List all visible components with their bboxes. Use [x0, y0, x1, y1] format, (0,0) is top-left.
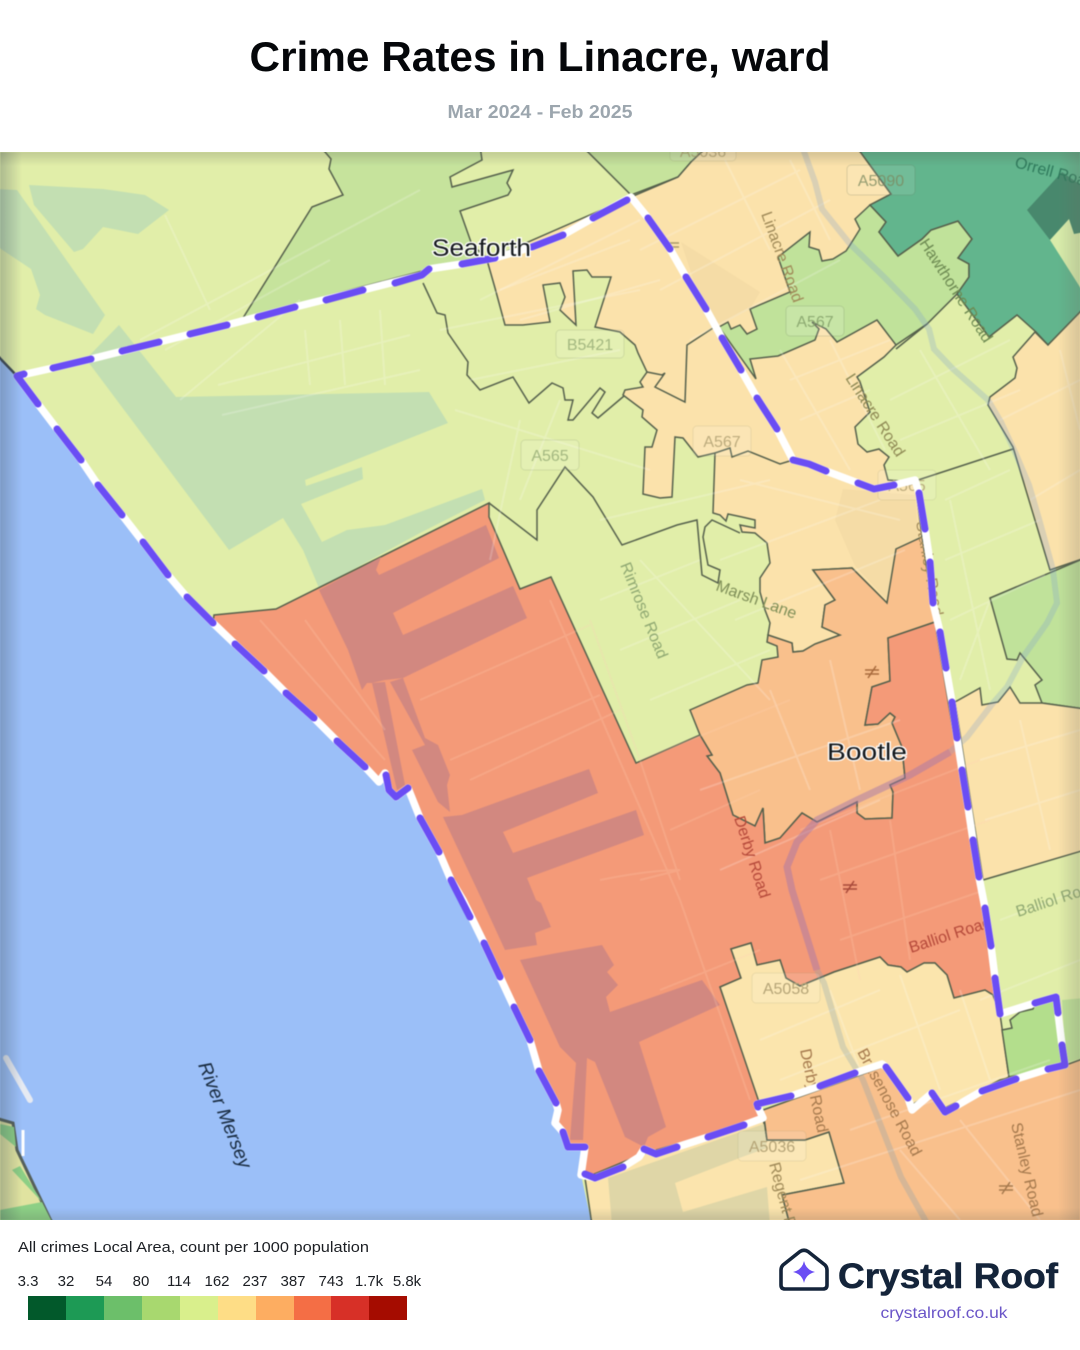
legend tick labels: 5.8k [393, 1273, 422, 1290]
area: light corner east [1050, 219, 1080, 295]
plate A567 west [693, 426, 751, 456]
docks: Seaforth basin [86, 325, 485, 588]
legend tick labels: 80 [133, 1273, 149, 1290]
legend tick labels: 743 [318, 1273, 344, 1290]
area: yellow south [720, 943, 1009, 1108]
street network [140, 160, 1080, 1220]
breakwater marks [6, 1058, 30, 1100]
docks: north pond [29, 185, 169, 252]
plate B5421 [556, 330, 624, 358]
area: red docks and Bootle south [213, 503, 1000, 1178]
road: Derby Road north: Derby Road [730, 814, 773, 900]
map edge shading bottom [0, 1208, 1080, 1220]
road: Linacre Road south: Linacre Road [842, 371, 908, 460]
road: Brasenose Road: Brasenose Road [853, 1046, 924, 1159]
legend tick labels: 162 [204, 1273, 230, 1290]
road: Stanley Road north: Stanley Road [912, 520, 945, 617]
area: green north tip [586, 152, 700, 196]
plate A5036 south [738, 1131, 806, 1161]
plate A565 east [878, 470, 936, 500]
area: light green Balliol small [1000, 1002, 1061, 1078]
area: green east [990, 558, 1080, 709]
legend colour scale [28, 1296, 407, 1320]
canal south [817, 970, 928, 1225]
area: orange Bootle [690, 537, 935, 843]
area: green Seaforth [243, 146, 513, 318]
area: yellow south-east [955, 687, 1080, 880]
plate A567 east [786, 306, 844, 336]
plate A567 west: A567 [703, 434, 741, 451]
road: Derby Road south: Derby Road [796, 1047, 830, 1134]
plate A565: A565 [531, 448, 569, 465]
legend tick labels: 387 [280, 1273, 306, 1290]
dock water: south-west [608, 1124, 770, 1225]
water: River Mersey [0, 353, 592, 1225]
Wirral shore land [0, 1118, 53, 1225]
rail station icons [669, 243, 1013, 1194]
road number plates [521, 135, 936, 1161]
legend tick labels: 54 [96, 1273, 112, 1290]
icon: house with star [781, 1250, 827, 1289]
canal through red area [787, 752, 950, 970]
area: teal Orrell [856, 146, 1080, 345]
map base land [0, 147, 1080, 1225]
area: green far east [1062, 998, 1080, 1063]
Wirral shore green strips [0, 1124, 52, 1222]
area tint: park north [681, 242, 760, 329]
boundary lines on base land [423, 283, 1013, 583]
title: Crime Rates in Linacre, ward [250, 33, 830, 80]
legend tick labels: 1.7k [355, 1273, 384, 1290]
area: darkest green corner [1027, 172, 1080, 240]
road: Hawthorne Road: Hawthorne Road [916, 236, 995, 346]
legend title: All crimes Local Area, count per 1000 population [18, 1239, 369, 1256]
road: Regent Road: Regent Road [765, 1161, 806, 1256]
road: Balliol Road west: Balliol Road [907, 914, 993, 957]
station: Bootle New Strand [843, 881, 857, 893]
dock water: entrance channels [372, 678, 450, 812]
brand name: Crystal Roof [838, 1257, 1058, 1296]
shore line north-west [0, 356, 16, 375]
road: Marsh Lane: Marsh Lane [714, 578, 799, 623]
road names [616, 154, 1080, 1256]
station: Seaforth [669, 243, 679, 247]
plate A5036 top [670, 135, 736, 161]
place label: Seaforth: Seaforth [432, 235, 531, 262]
brand url: crystalroof.co.uk [880, 1305, 1009, 1322]
plate A5090 [847, 165, 915, 195]
dock roads in red area [260, 600, 990, 1100]
dock water: central dock [443, 769, 644, 950]
canal north and east [802, 146, 1057, 752]
brand logo [781, 1250, 1058, 1322]
area: yellow south-west docks [585, 1118, 844, 1225]
map edge shading top [0, 152, 1080, 166]
plate A565 east: A565 [888, 478, 926, 495]
subtitle: date range: Mar 2024 - Feb 2025 [448, 102, 632, 122]
dock water: north dock [319, 525, 527, 690]
plate A5058: A5058 [763, 981, 809, 998]
plate A5036 south: A5036 [749, 1139, 795, 1156]
plate A565 [521, 440, 579, 470]
legend [18, 1239, 422, 1320]
area: orange south-east [763, 1058, 1080, 1225]
boundary lines inside yellow band [647, 324, 927, 464]
station: Bootle Oriel [865, 666, 879, 678]
area tint: rail yard [888, 548, 896, 588]
legend tick labels: 114 [167, 1273, 191, 1290]
area: yellow band north and centre [487, 146, 922, 652]
dock water: south dock [520, 945, 720, 1147]
road: Stanley Road south: Stanley Road [1007, 1121, 1045, 1219]
water label: River Mersey: River Mersey [193, 1059, 256, 1173]
pier mark [22, 1130, 24, 1156]
docks: west channel [0, 189, 105, 334]
ward boundary [17, 197, 1065, 1178]
map edge shading right [1058, 152, 1080, 1220]
road: Linacre Road north: Linacre Road [757, 210, 806, 305]
legend tick labels [18, 1273, 422, 1290]
ward boundary purple dashes [17, 200, 1065, 1178]
plate A567 east: A567 [796, 314, 834, 331]
area: yellow east strip [988, 307, 1080, 570]
road: Rimrose Road: Rimrose Road [616, 560, 670, 661]
plate A5036 top: A5036 [680, 144, 726, 161]
place label: Bootle: Bootle [827, 739, 907, 766]
legend tick labels: 237 [242, 1273, 268, 1290]
plate A5058 [752, 973, 820, 1003]
ward boundary white casing [17, 197, 1065, 1178]
station: Bank Hall [999, 1182, 1013, 1194]
legend tick labels: 32 [58, 1273, 74, 1290]
plate B5421: B5421 [567, 337, 613, 354]
plate A5090: A5090 [858, 173, 904, 190]
area: green Linacre [719, 205, 972, 379]
map edge shading left [0, 152, 22, 1220]
legend tick labels: 3.3 [18, 1273, 38, 1290]
